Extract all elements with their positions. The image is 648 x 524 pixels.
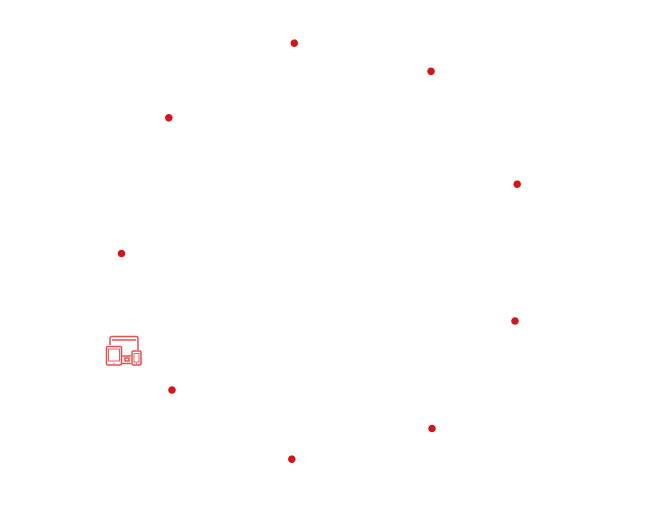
marker dot: top bbox=[290, 39, 298, 47]
marker dot: left bbox=[118, 250, 125, 257]
marker dot: right lower bbox=[511, 317, 519, 325]
marker dot: upper left bbox=[165, 114, 173, 122]
marker dot: lower right bbox=[428, 425, 436, 432]
marker dot: bottom bbox=[288, 455, 296, 463]
icon: devices (monitor, tablet, phone) bbox=[106, 336, 141, 365]
marker dot: upper right bbox=[427, 68, 435, 75]
marker dot: lower left bbox=[168, 386, 176, 394]
marker dot: right upper bbox=[513, 180, 521, 188]
